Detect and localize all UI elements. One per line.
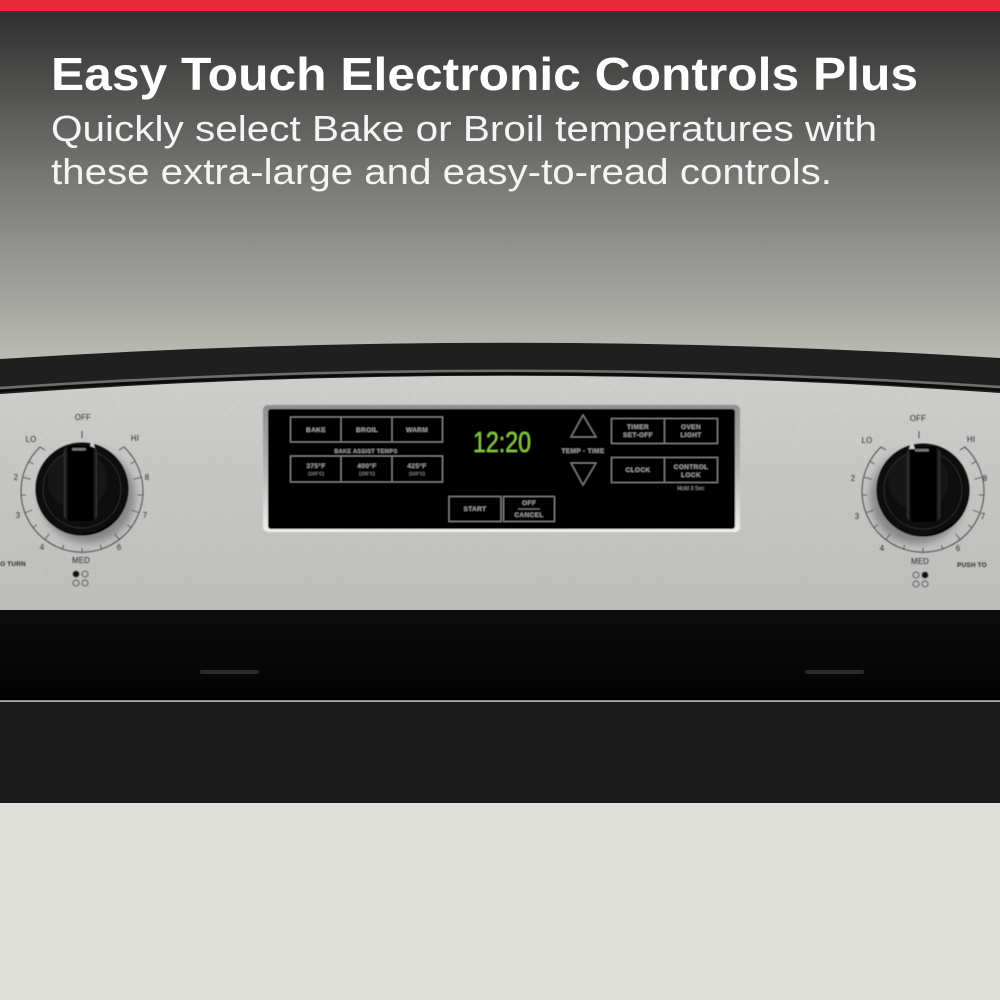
- dial labels: 4: [880, 544, 885, 553]
- dial labels: 7: [143, 511, 147, 520]
- mode buttons: [290, 417, 442, 442]
- black glass: [268, 409, 735, 529]
- mode buttons: BROIL: [356, 427, 378, 434]
- dial labels: 6: [117, 543, 121, 552]
- dial labels: 8: [983, 474, 987, 483]
- dial labels: HI: [131, 434, 139, 443]
- knob: [36, 439, 135, 543]
- dial labels: 6: [956, 544, 960, 553]
- right burner dial: [851, 414, 987, 587]
- dial labels: 2: [14, 473, 18, 482]
- dark line under highlight: [0, 374, 1000, 391]
- door seam: [0, 700, 1000, 702]
- dial labels: 3: [855, 512, 859, 521]
- mode buttons: BAKE: [306, 427, 326, 434]
- knob: [870, 440, 970, 544]
- title: Easy Touch Electronic Controls Plus: [51, 48, 918, 100]
- temperature buttons: (220°C): [409, 471, 425, 476]
- bake assist heading: BAKE ASSIST TEMPS: [334, 449, 398, 455]
- dial labels: LO: [26, 435, 36, 444]
- clock and lock buttons: CONTROL: [674, 464, 708, 471]
- dial labels: [851, 414, 987, 569]
- fascia highlight right: [805, 670, 864, 674]
- dial labels: 7: [981, 512, 985, 521]
- temperature buttons: 425°F: [407, 462, 427, 470]
- red top bar: [0, 0, 1000, 11]
- dial labels: 3: [16, 511, 20, 520]
- clock and lock buttons: [612, 457, 718, 483]
- temp time label: TEMP · TIME: [561, 448, 605, 455]
- oven door: [0, 702, 1000, 803]
- gradient header backdrop: [0, 11, 1000, 361]
- dial labels: OFF: [910, 414, 926, 423]
- oven range illustration: [0, 343, 1000, 803]
- dial labels: 2: [851, 474, 855, 483]
- timer and light buttons: SET-OFF: [623, 432, 653, 439]
- off cancel button: CANCEL: [514, 512, 544, 519]
- dial labels: PUSH TO: [957, 562, 987, 569]
- start button: [449, 496, 501, 522]
- dial labels: MED: [911, 557, 929, 566]
- dial labels: LO: [862, 436, 872, 445]
- timer and light buttons: OVEN: [681, 424, 701, 431]
- hold note: Hold 3 Sec: [678, 486, 705, 492]
- dial labels: 4: [40, 543, 45, 552]
- off cancel button: [504, 496, 554, 522]
- temperature buttons: (190°C): [308, 471, 324, 476]
- dial labels: HI: [967, 435, 975, 444]
- dial scale: [21, 431, 143, 553]
- edge highlight: [0, 371, 1000, 388]
- left burner dial: [0, 413, 149, 586]
- timer and light buttons: [612, 418, 718, 444]
- description text: Quickly select Bake or Broil temperatures with: [51, 108, 877, 149]
- description text: these extra-large and easy-to-read controls.: [51, 151, 832, 192]
- burner position dots: [913, 572, 928, 587]
- lower black fascia: [0, 610, 1000, 700]
- off cancel button: OFF: [522, 500, 536, 507]
- clock and lock buttons: LOCK: [681, 472, 701, 479]
- clock and lock buttons: CLOCK: [626, 467, 650, 474]
- dial labels: [0, 413, 149, 568]
- dial labels: O TURN: [0, 561, 26, 568]
- temperature buttons: (205°C): [359, 471, 375, 476]
- arrow down: [571, 463, 596, 485]
- dial labels: MED: [72, 556, 90, 565]
- dial labels: OFF: [75, 413, 91, 422]
- description text: [51, 108, 877, 192]
- timer and light buttons: TIMER: [627, 424, 649, 431]
- black cooktop edge: [0, 343, 1000, 395]
- mode buttons: WARM: [406, 427, 428, 434]
- fascia highlight left: [200, 670, 259, 674]
- digital clock: 12:20: [473, 427, 531, 459]
- temperature buttons: 400°F: [357, 462, 377, 470]
- burner position dots: [73, 571, 88, 586]
- panel bezel: [263, 405, 740, 532]
- temperature buttons: 375°F: [306, 462, 326, 470]
- timer and light buttons: LIGHT: [680, 432, 702, 439]
- brushed steel texture: [0, 376, 1000, 610]
- temperature buttons: [290, 456, 442, 482]
- start button: START: [464, 506, 486, 513]
- steel control panel: [0, 376, 1000, 610]
- dial scale: [862, 431, 984, 553]
- arrow up: [571, 415, 596, 437]
- control display panel: [263, 405, 740, 532]
- dial labels: 8: [145, 473, 149, 482]
